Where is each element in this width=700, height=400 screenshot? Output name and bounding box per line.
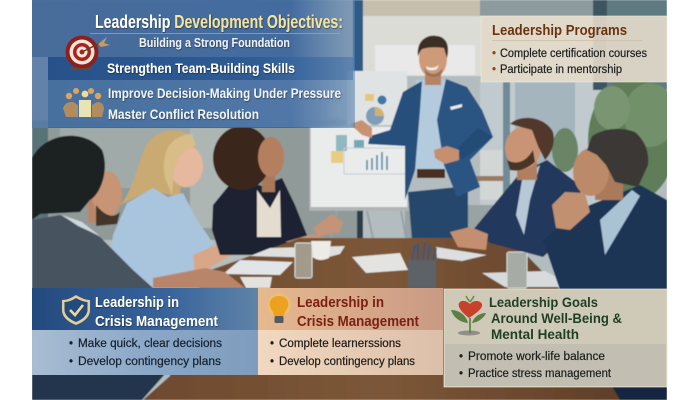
panel: leadership development objectives bbox=[32, 0, 355, 128]
bullet list: well-being: Promote work-life balance bbox=[468, 351, 605, 363]
objective: conflict resolution: Master Conflict Resolution bbox=[108, 107, 259, 122]
heading: objectives title: Leadership Development Objectives: bbox=[95, 12, 343, 32]
heading: crisis management orange bbox=[297, 295, 419, 330]
heading: crisis management: Leadership in bbox=[95, 295, 179, 311]
icon: target with arrow bbox=[66, 36, 110, 70]
bullet list: programs: Participate in mentorship bbox=[500, 64, 622, 76]
plants bbox=[551, 82, 667, 194]
bullet list: crisis orange: Complete learnerssions bbox=[279, 338, 401, 350]
man with clasped hands bbox=[543, 129, 667, 290]
icon: shield with check bbox=[62, 295, 90, 325]
bullet list: crisis orange: • bbox=[270, 356, 274, 368]
bullet list: programs: • bbox=[492, 64, 496, 76]
meeting table with items bbox=[143, 238, 622, 400]
bullet list: crisis blue: • bbox=[69, 338, 73, 350]
foreground man in grey suit bbox=[32, 136, 667, 400]
blonde woman bbox=[111, 130, 232, 288]
icon: heart plant bbox=[451, 296, 486, 336]
heading: well-being goals bbox=[489, 295, 622, 342]
bullet list: crisis blue: Develop contingency plans bbox=[78, 356, 221, 368]
bullet list: well-being: • bbox=[459, 351, 463, 363]
panel: leadership programs bbox=[481, 16, 667, 82]
bullet list: crisis blue bbox=[69, 338, 222, 368]
panel: crisis management blue bbox=[32, 288, 258, 375]
bullet list: crisis blue: Make quick, clear decisions bbox=[78, 338, 222, 350]
heading: programs: Leadership Programs bbox=[492, 22, 627, 39]
icon: team of people bbox=[63, 88, 104, 117]
flipchart with charts bbox=[310, 71, 408, 238]
bullet list: crisis orange: • bbox=[270, 338, 274, 350]
heading: crisis management orange: Crisis Management bbox=[297, 314, 419, 330]
bullet list: crisis blue: • bbox=[69, 356, 73, 368]
heading: crisis management bbox=[95, 295, 218, 330]
heading: crisis management orange: Leadership in bbox=[297, 295, 384, 311]
panel: well-being goals bbox=[444, 289, 667, 387]
bullet list: crisis orange: Develop contingency plans bbox=[279, 356, 415, 368]
bullet list: well-being: Practice stress management bbox=[468, 368, 612, 380]
heading: well-being goals: Around Well-Being & bbox=[491, 311, 622, 326]
bullet list: well-being: • bbox=[459, 368, 463, 380]
curly haired woman bbox=[212, 126, 343, 255]
heading: well-being goals: Leadership Goals bbox=[489, 295, 598, 310]
presenter bbox=[350, 36, 493, 240]
bullet list: well-being bbox=[459, 351, 612, 380]
bullet list: crisis orange bbox=[270, 338, 415, 368]
heading: well-being goals: Mental Health bbox=[491, 327, 579, 342]
panel: crisis management orange bbox=[258, 288, 443, 375]
bearded man on the right bbox=[450, 118, 590, 257]
objective: decision-making: Improve Decision-Making Under Pressure bbox=[108, 86, 341, 101]
bullet list: programs: Complete certification courses bbox=[500, 48, 647, 60]
bullet list: programs bbox=[492, 48, 647, 76]
objective: team-building: Strengthen Team-Building Skills bbox=[107, 61, 295, 76]
icon: light bulb bbox=[267, 293, 291, 323]
heading: crisis management: Crisis Management bbox=[95, 314, 218, 330]
bullet list: programs: • bbox=[492, 48, 496, 60]
subheading: Building a Strong Foundation bbox=[139, 36, 290, 50]
